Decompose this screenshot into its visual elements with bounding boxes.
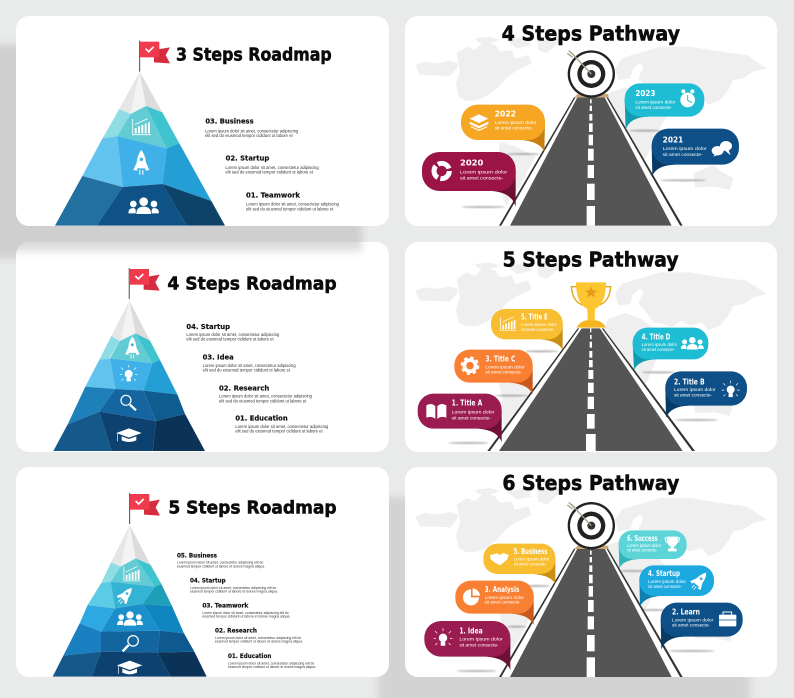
bubble 1 Title A: sit amet consecte- [452, 415, 492, 420]
bubble 2 Learn [661, 603, 743, 649]
step 04 Startup [186, 323, 280, 342]
step 01 Education: 01. Education [228, 653, 271, 660]
bubble 3 Title C [454, 350, 533, 394]
step 03 Business: 03. Business [205, 118, 254, 126]
icon: trophy [571, 282, 611, 328]
cast shadow over 4 steps card top [16, 242, 364, 254]
step 01 Education: 01. Education [235, 415, 288, 423]
step 05 Business: 05. Business [177, 552, 217, 559]
bubble 2023: Lorem ipsum dolor [635, 99, 676, 104]
bubble 2022 [461, 105, 545, 152]
bubble 6 Success: Lorem ipsum dolor [627, 543, 661, 548]
step 01 Education: eiusmod tempor cididunt ut labore et dolore magna aliqua. [228, 665, 316, 669]
bubble 4 Startup: sit amet consecte- [648, 584, 682, 589]
step 02 Research: Lorem ipsum dolor sit amet, consectetur adipiscing [219, 394, 313, 399]
shadow behind 6 steps panel [378, 497, 750, 698]
bubble 4 Startup: 4. Startup [648, 569, 680, 578]
panel: 3 steps roadmap card [16, 16, 389, 226]
panel: 6 steps pathway card [405, 467, 777, 677]
step 01 Education [228, 653, 316, 669]
step 03 Teamwork: 03. Teamwork [202, 603, 249, 610]
step 01 Teamwork: 01. Teamwork [246, 192, 300, 200]
step 04 Startup [190, 578, 278, 594]
bubble 2020: sit amet consecte- [460, 176, 504, 181]
bubble 2020 [422, 152, 516, 207]
bubble ground shadows [462, 130, 707, 208]
bubble 2020: Lorem ipsum dolor [460, 169, 508, 174]
step 01 Teamwork [246, 192, 340, 211]
bubble 5 Title E: 5. Title E [521, 312, 548, 321]
mountain pyramid [53, 525, 207, 677]
panel: 5 steps roadmap card [16, 467, 389, 677]
bubble 2021: 2021 [663, 136, 683, 145]
step 03 Business [205, 118, 299, 138]
step 02 Startup: Lorem ipsum dolor sit amet, consectetur adipiscing [225, 165, 319, 170]
icon: target with arrow [567, 502, 615, 549]
step 05 Business: eiusmod tempor cididunt ut labore et dolore magna aliqua. [177, 564, 265, 568]
bubble 5 Title E: Lorem ipsum dolor [521, 322, 557, 327]
icon: flag [139, 41, 170, 72]
bubble 5 Business: 5. Business [514, 547, 547, 556]
bubble 3 Analysis: Lorem ipsum dolor [485, 595, 525, 600]
shadow behind 3 steps panel [0, 45, 362, 258]
bubble 2021: Lorem ipsum dolor [663, 146, 707, 151]
bubble 2021 [652, 129, 739, 176]
bubble 3 Analysis: 3. Analysis [485, 585, 520, 594]
panel: 4 steps roadmap card [16, 242, 389, 452]
step 01 Education: Lorem ipsum dolor sit amet, consectetur adipiscing elit do [228, 661, 314, 665]
section: 4 steps pathway [415, 22, 767, 226]
panel: 5 steps pathway card [405, 242, 777, 452]
step 03 Teamwork: Lorem ipsum dolor sit amet, consectetur adipiscing elit do [202, 611, 289, 615]
title: 4 Steps Roadmap [167, 273, 337, 294]
bubble 2023 [625, 83, 704, 129]
step 01 Education: Lorem ipsum dolor sit amet, consectetur adipiscing [235, 424, 329, 429]
bubble 4 Title D: sit amet consecte- [642, 347, 675, 352]
bubble 2 Learn: Lorem ipsum dolor [672, 617, 714, 622]
icon: flag [129, 493, 160, 524]
bubble 6 Success: sit amet consecte- [627, 547, 658, 552]
step 02 Research [215, 628, 303, 644]
step 04 Startup: eiusmod tempor cididunt ut labore et dolore magna aliqua. [190, 590, 278, 594]
step 02 Research: elit sed do eiusmod tempor cididunt ut labore et [219, 398, 307, 403]
bubble 6 Success [619, 530, 687, 568]
bubble 2 Title B: 2. Title B [674, 377, 705, 386]
step 02 Research: 02. Research [219, 384, 269, 392]
title: 6 Steps Pathway [502, 471, 679, 495]
mountain pyramid [55, 72, 225, 226]
bubble 3 Analysis [455, 581, 534, 625]
bubble 2 Title B: sit amet consecte- [674, 392, 713, 397]
step 02 Research: eiusmod tempor cididunt ut labore et dolore magna aliqua. [215, 640, 303, 644]
bubble 3 Title C: sit amet consecte- [485, 369, 523, 374]
bubble 1 Title A: 1. Title A [452, 399, 483, 408]
bubble 1 Idea: 1. Idea [459, 626, 483, 635]
bubble 2 Learn: sit amet consecte- [672, 623, 711, 628]
bubble 4 Title D: 4. Title D [642, 333, 671, 342]
section: 5 steps pathway [415, 248, 767, 451]
step 03 Business: elit sed do eiusmod tempor cididunt ut labore et [205, 133, 294, 138]
bubble 2023: 2023 [635, 89, 655, 98]
title: 5 Steps Roadmap [168, 499, 337, 519]
bubble 2022: 2022 [495, 110, 516, 119]
step 03 Idea: 03. Idea [203, 354, 234, 362]
world map [415, 486, 767, 658]
bubble 2022: sit amet consecte- [495, 125, 533, 130]
bubble 5 Business: sit amet consecte- [514, 561, 547, 566]
step 03 Idea [203, 354, 296, 373]
section: 3 steps roadmap [55, 41, 340, 226]
road [499, 549, 683, 677]
step 02 Startup: elit sed do eiusmod tempor cididunt ut labore et [225, 170, 314, 175]
mountain pyramid [53, 301, 205, 451]
section: 5 steps roadmap [53, 493, 337, 677]
bubble 3 Title C: Lorem ipsum dolor [485, 364, 525, 369]
title: 3 Steps Roadmap [176, 46, 332, 66]
step 03 Teamwork [202, 603, 290, 619]
step 03 Business: Lorem ipsum dolor sit amet, consectetur adipiscing [205, 128, 299, 133]
step 03 Idea: Lorem ipsum dolor sit amet, consectetur adipiscing [203, 363, 296, 368]
bubble 6 Success: 6. Success [627, 534, 658, 543]
section: 4 steps roadmap [53, 268, 337, 451]
bubble 2022: Lorem ipsum dolor [495, 120, 537, 125]
bubble 1 Title A [418, 394, 502, 442]
bubble 4 Title D: Lorem ipsum dolor [642, 342, 677, 347]
step 02 Startup: 02. Startup [226, 155, 269, 163]
bubble 4 Startup [639, 565, 714, 607]
step 03 Teamwork: eiusmod tempor cididunt ut labore et dolore magna aliqua. [202, 615, 290, 619]
step 01 Education [235, 415, 329, 434]
bubble 2 Title B: Lorem ipsum dolor [674, 387, 716, 392]
bubble 1 Idea [424, 621, 510, 670]
step 02 Startup [225, 155, 319, 175]
step 05 Business [177, 552, 265, 568]
world map [415, 35, 767, 207]
step 02 Research: Lorem ipsum dolor sit amet, consectetur adipiscing elit do [215, 636, 301, 640]
step 04 Startup: 04. Startup [186, 323, 230, 331]
icon: target with arrow [567, 50, 615, 98]
road [487, 328, 695, 451]
bubble 5 Title E: sit amet consecte- [521, 327, 555, 332]
step 02 Research: 02. Research [215, 628, 257, 635]
bubble 3 Analysis: sit amet consecte- [485, 600, 521, 605]
bubble 5 Business [483, 544, 555, 584]
step 04 Startup: Lorem ipsum dolor sit amet, consectetur adipiscing elit do [190, 586, 276, 590]
bubble 2023: sit amet consecte- [635, 105, 673, 110]
bubble 2 Learn: 2. Learn [672, 607, 700, 616]
bubble 2 Title B [665, 371, 747, 418]
road [499, 97, 683, 226]
step 01 Teamwork: elit sed do eiusmod tempor cididunt ut labore et [246, 206, 334, 211]
section: 6 steps pathway [415, 471, 767, 677]
title: 4 Steps Pathway [502, 22, 680, 46]
bubble 3 Title C: 3. Title C [485, 354, 515, 363]
step 01 Education: elit sed do eiusmod tempor cididunt ut labore et [235, 429, 323, 434]
bubble 5 Title E [491, 309, 563, 350]
bubble 1 Idea: sit amet consecte- [459, 642, 499, 647]
bubble 5 Business: Lorem ipsum dolor [514, 557, 550, 562]
bubble 4 Startup: Lorem ipsum dolor [648, 579, 687, 584]
title: 5 Steps Pathway [503, 248, 679, 272]
icon: flag [129, 268, 160, 299]
step 02 Research [219, 384, 313, 403]
step 04 Startup: elit sed do eiusmod tempor cididunt ut labore et [186, 337, 274, 342]
step 03 Idea: elit sed do eiusmod tempor cididunt ut labore et [203, 368, 291, 373]
step 04 Startup: 04. Startup [190, 578, 226, 585]
bubble ground shadows [448, 350, 718, 444]
step 04 Startup: Lorem ipsum dolor sit amet, consectetur adipiscing [186, 332, 280, 337]
bubble ground shadows [457, 570, 715, 672]
bubble 1 Idea: Lorem ipsum dolor [459, 637, 503, 642]
bubble 2021: sit amet consecte- [663, 152, 703, 157]
panel: 4 steps pathway card [405, 16, 777, 226]
step 01 Teamwork: Lorem ipsum dolor sit amet, consectetur adipiscing [246, 202, 340, 207]
bubble 2020: 2020 [460, 159, 484, 168]
bubble 1 Title A: Lorem ipsum dolor [452, 410, 495, 415]
step 05 Business: Lorem ipsum dolor sit amet, consectetur adipiscing elit do [177, 561, 263, 565]
bubble 4 Title D [633, 328, 708, 370]
world map [415, 261, 767, 432]
